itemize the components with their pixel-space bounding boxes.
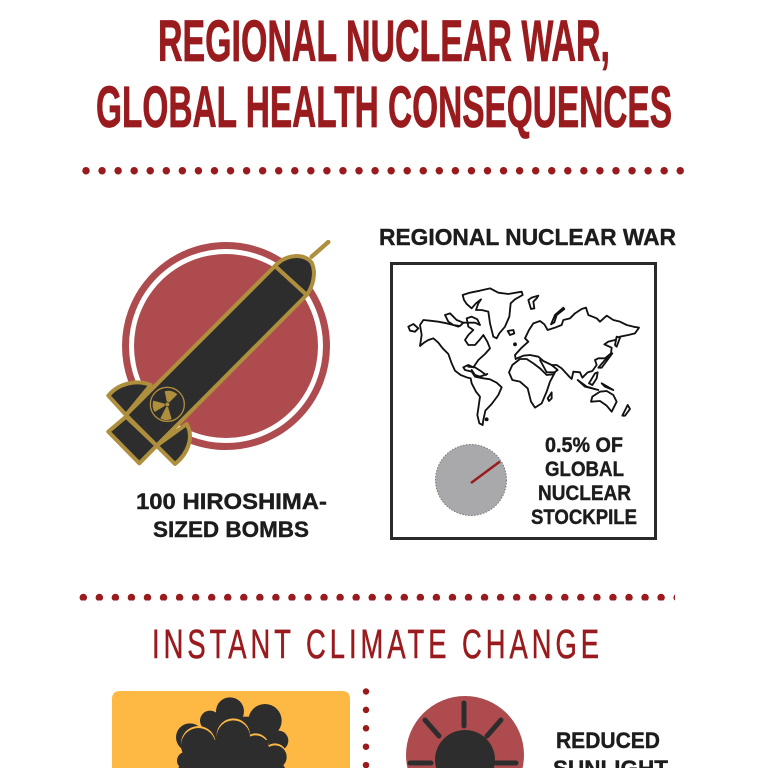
label: 100 Hiroshima-sized bombs: 100 HIROSHIMA- — [136, 489, 327, 514]
label: 100 Hiroshima-sized bombs — [136, 489, 327, 542]
panel: smoke cloud — [112, 691, 350, 768]
icon: dimmed sun — [406, 696, 524, 768]
icon: smoke cloud — [176, 697, 288, 768]
icon: rocket on red circle — [108, 242, 328, 464]
text: 0.5% of global nuclear stockpile: STOCKPILE — [531, 506, 637, 529]
panel: map box — [392, 264, 656, 538]
heading: regional nuclear war: REGIONAL NUCLEAR WAR — [379, 224, 676, 250]
world map — [408, 288, 639, 425]
text: reduced sunlight: REDUCED — [556, 728, 660, 753]
pie: 0.5 percent — [436, 444, 506, 516]
text: reduced sunlight — [553, 728, 669, 768]
label: 100 Hiroshima-sized bombs: SIZED BOMBS — [153, 517, 309, 542]
text: 0.5% of global nuclear stockpile: NUCLEAR — [538, 482, 631, 505]
text: 0.5% of global nuclear stockpile: 0.5% OF — [545, 434, 623, 457]
title — [96, 9, 672, 140]
text: 0.5% of global nuclear stockpile — [531, 434, 637, 529]
text: 0.5% of global nuclear stockpile: GLOBAL — [545, 458, 624, 481]
